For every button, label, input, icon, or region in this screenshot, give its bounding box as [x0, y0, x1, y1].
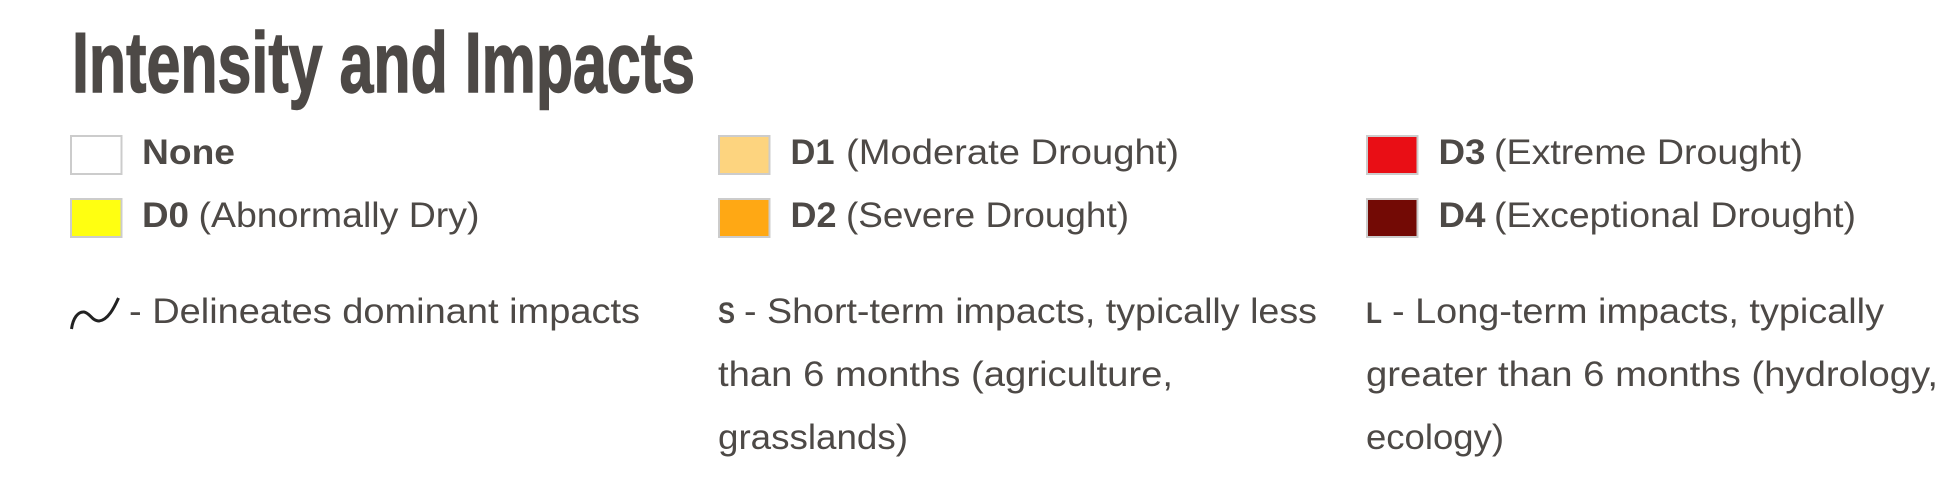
title: Intensity and Impacts: [72, 16, 695, 111]
note: short-term impacts: - Short-term impacts, typically less: [744, 292, 1317, 331]
note: short-term impacts: than 6 months (agriculture,: [718, 355, 1173, 394]
legend item: D1: [719, 133, 1179, 174]
legend item: D4: [1367, 196, 1856, 237]
legend item: D4: (Exceptional Drought): [1494, 196, 1856, 235]
note: long-term impacts: [1366, 292, 1938, 457]
note: long-term impacts: greater than 6 months (hydrology,: [1366, 355, 1938, 394]
legend item: None: [71, 133, 235, 174]
legend item: None: None: [142, 133, 235, 172]
legend item: D4: D4: [1438, 196, 1486, 235]
icon: squiggle line: [72, 298, 118, 329]
legend item: D1: (Moderate Drought): [846, 133, 1179, 172]
legend item: D2: (Severe Drought): [846, 196, 1129, 235]
legend item: D1: D1: [790, 133, 834, 172]
note: long-term impacts: - Long-term impacts, typically: [1392, 292, 1885, 331]
legend item: D3: D3: [1438, 133, 1486, 172]
legend item: D2: D2: [790, 196, 836, 235]
note: short-term impacts: grasslands): [718, 418, 908, 457]
legend item: D3: [1367, 133, 1803, 174]
legend item: D0: (Abnormally Dry): [198, 196, 480, 235]
legend item: D0: D0: [142, 196, 189, 235]
legend item: D0: [71, 196, 480, 237]
note: dominant impacts: - Delineates dominant impacts: [129, 292, 640, 331]
note: short-term impacts: [718, 292, 1317, 457]
note: long-term impacts: L: [1366, 297, 1382, 330]
note: long-term impacts: ecology): [1366, 418, 1504, 457]
legend item: D2: [719, 196, 1129, 237]
note: short-term impacts: S: [718, 297, 735, 330]
legend item: D3: (Extreme Drought): [1494, 133, 1803, 172]
